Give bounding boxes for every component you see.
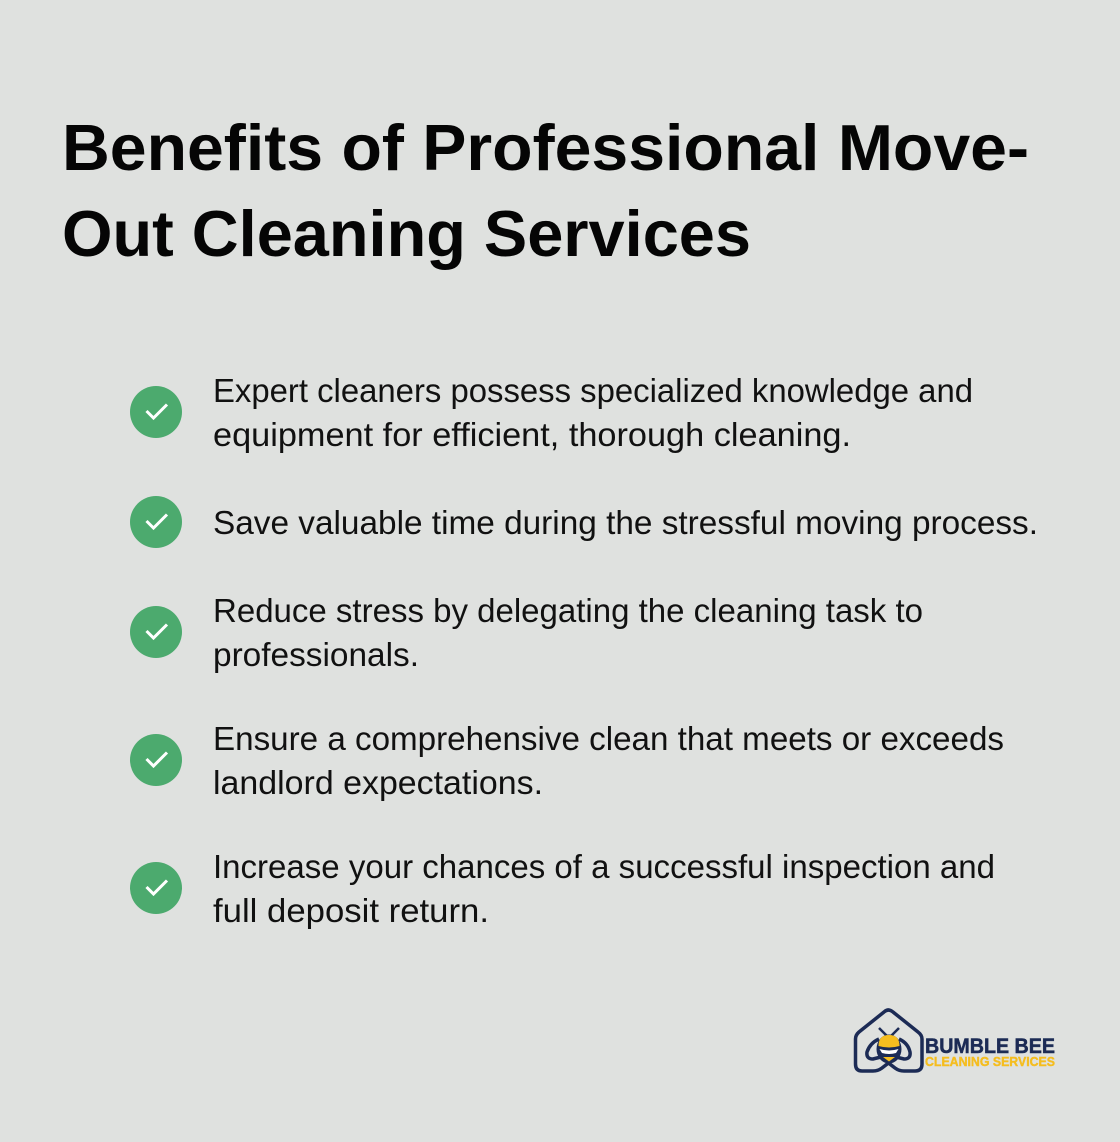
text: benefit 4: Ensure a comprehensive clean that meets or exceeds xyxy=(213,720,1004,757)
benefit 5 xyxy=(130,848,995,929)
logo wordmark: CLEANING SERVICES xyxy=(925,1055,1055,1069)
logo wordmark: BUMBLE BEE xyxy=(925,1034,1055,1058)
title: Benefits of Professional Move- xyxy=(62,111,1029,184)
benefit 3 xyxy=(130,592,923,673)
logo xyxy=(856,1010,1055,1071)
benefit 2 xyxy=(130,496,1038,548)
text: benefit 1 xyxy=(213,372,973,453)
text: benefit 2: Save valuable time during the stressful moving process. xyxy=(213,504,1038,541)
text: benefit 1: equipment for efficient, thorough cleaning. xyxy=(213,416,851,453)
icon: check 3 xyxy=(130,606,182,658)
benefit 4 xyxy=(130,720,1004,801)
icon: check 5 xyxy=(130,862,182,914)
logo wordmark xyxy=(925,1034,1055,1069)
text: benefit 5: full deposit return. xyxy=(213,892,489,929)
text: benefit 4: landlord expectations. xyxy=(213,764,543,801)
icon: check 1 xyxy=(130,386,182,438)
benefit 1 xyxy=(130,372,973,453)
text: benefit 3: Reduce stress by delegating the cleaning task to xyxy=(213,592,923,629)
text: benefit 3 xyxy=(213,592,923,673)
text: benefit 4 xyxy=(213,720,1004,801)
text: benefit 5 xyxy=(213,848,995,929)
icon: check 4 xyxy=(130,734,182,786)
text: benefit 5: Increase your chances of a successful inspection and xyxy=(213,848,995,885)
title: Out Cleaning Services xyxy=(62,197,751,270)
title xyxy=(62,111,1029,270)
icon: check 2 xyxy=(130,496,182,548)
text: benefit 1: Expert cleaners possess specialized knowledge and xyxy=(213,372,973,409)
icon: bee house xyxy=(856,1010,922,1071)
text: benefit 3: professionals. xyxy=(213,636,419,673)
